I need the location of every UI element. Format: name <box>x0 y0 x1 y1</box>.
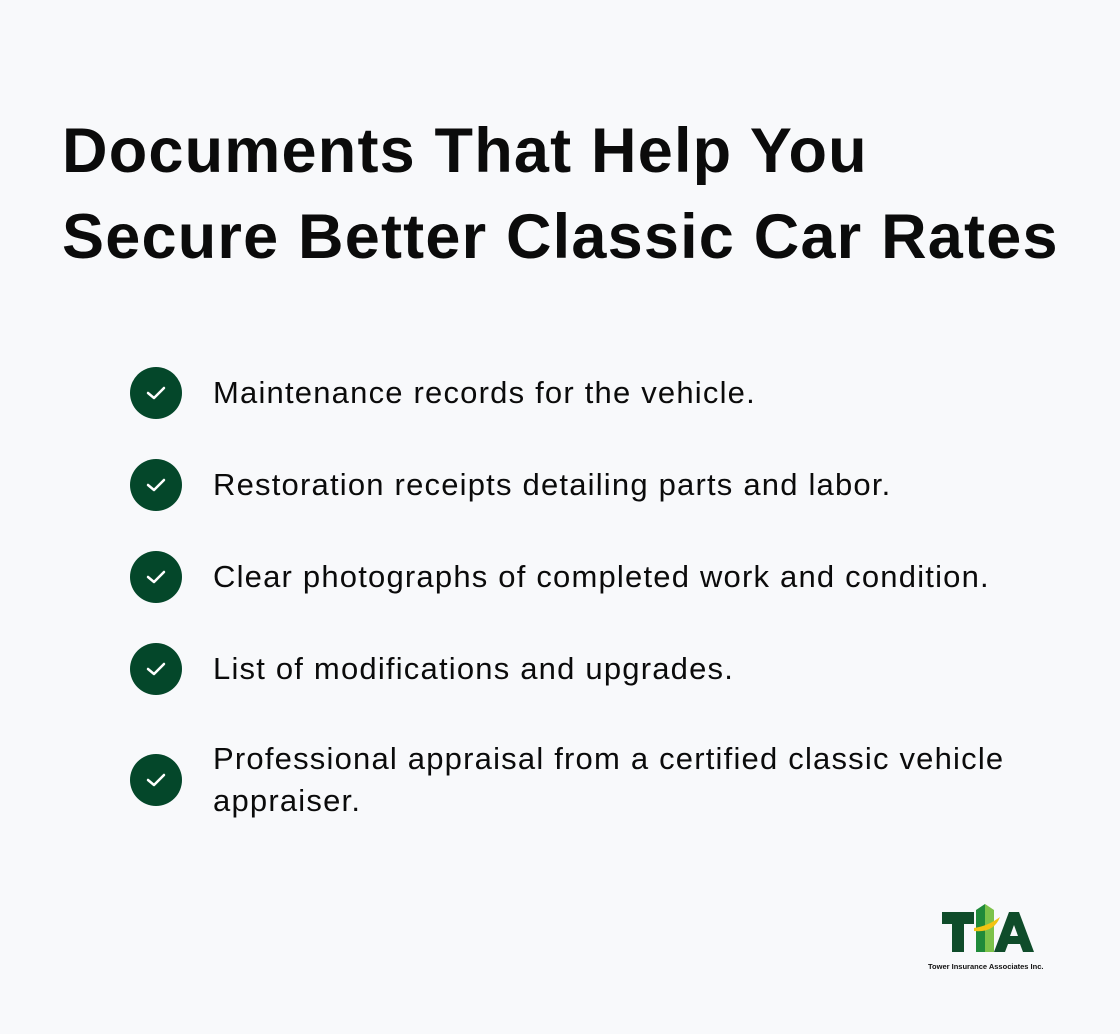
text: Professional appraisal from a certified classic vehicle <box>213 741 1004 776</box>
text: Clear photographs of completed work and condition. <box>213 559 990 594</box>
icon: check <box>130 643 182 695</box>
logo <box>928 904 1043 971</box>
title: Documents That Help You <box>62 116 868 186</box>
text: Restoration receipts detailing parts and labor. <box>213 467 892 502</box>
icon: check <box>130 754 182 806</box>
icon: check <box>130 551 182 603</box>
title: Secure Better Classic Car Rates <box>62 202 1059 272</box>
item: maintenance records <box>130 367 756 419</box>
item: restoration receipts <box>130 459 892 511</box>
text: Maintenance records for the vehicle. <box>213 375 756 410</box>
title <box>62 116 1059 272</box>
text <box>213 741 1004 818</box>
text: List of modifications and upgrades. <box>213 651 734 686</box>
logo caption: Tower Insurance Associates Inc. <box>928 962 1043 971</box>
icon: check <box>130 367 182 419</box>
icon: check <box>130 459 182 511</box>
item: photographs <box>130 551 990 603</box>
item: modifications <box>130 643 734 695</box>
text: appraiser. <box>213 783 361 818</box>
item: appraisal <box>130 741 1004 818</box>
